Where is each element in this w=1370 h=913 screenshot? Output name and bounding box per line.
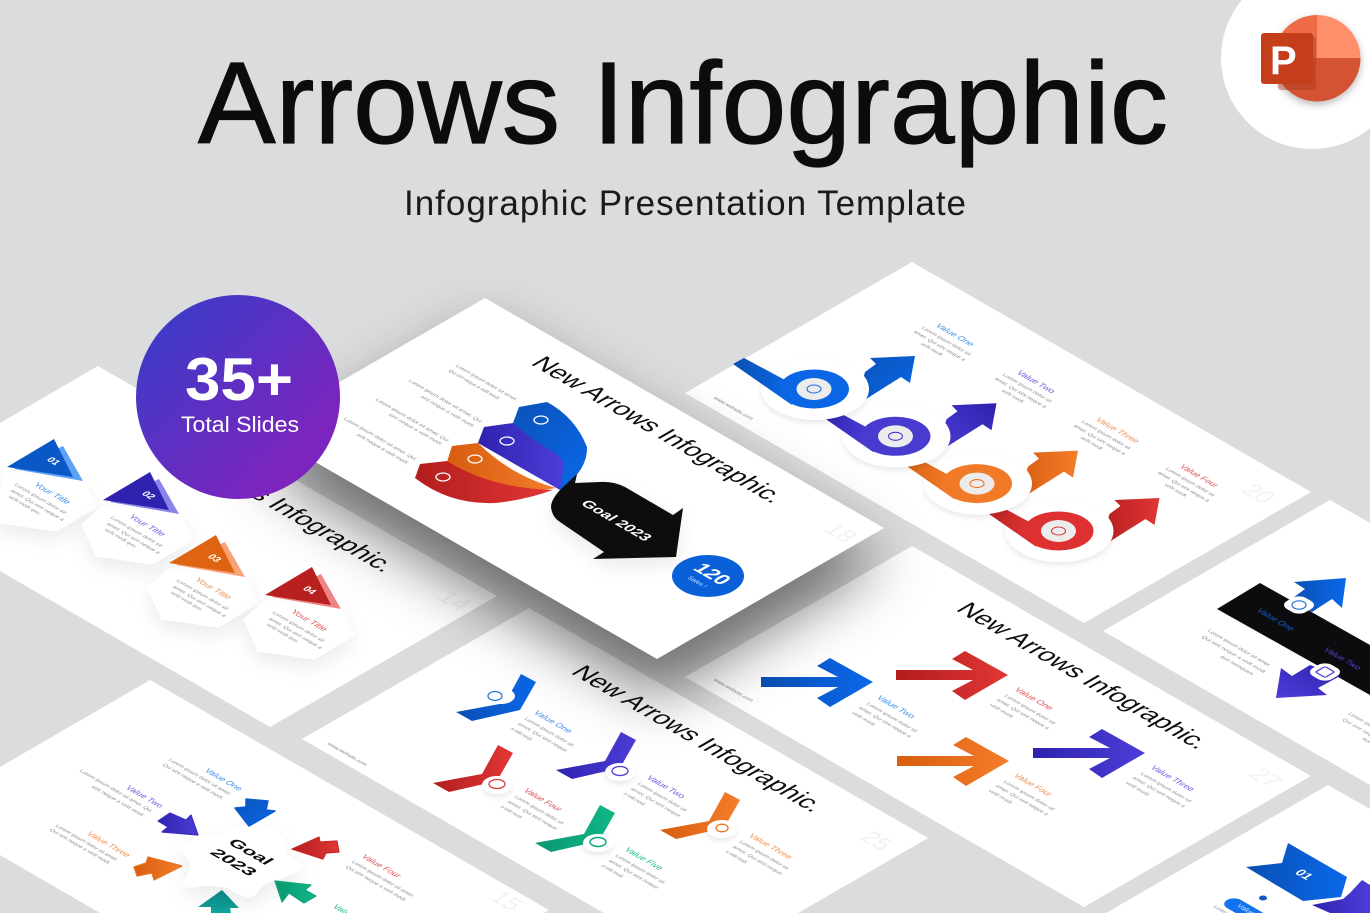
value four text: Lorem ipsum dolor sit — [1163, 467, 1217, 498]
value two text: velit modi. — [849, 711, 878, 728]
slide 14 title: New Arrows Infographic. — [136, 422, 403, 576]
timeline dot — [1259, 896, 1267, 900]
arrow purple — [1033, 729, 1145, 778]
arrow red — [896, 651, 1008, 700]
value one text — [508, 709, 576, 753]
card 04: 04 — [299, 585, 319, 596]
icon node purple — [1306, 661, 1344, 683]
layer icons — [436, 416, 548, 481]
value five text: Lorem ipsum dolor sit — [613, 854, 667, 885]
value one text — [987, 686, 1057, 731]
value two text: amet. Qui sint neque a — [856, 706, 913, 739]
goal label — [206, 836, 277, 879]
card 03: Lorem ipsum dolor sit — [174, 579, 230, 611]
card 01: 01 — [43, 456, 63, 467]
value three text: amet. Qui sint neque — [730, 845, 784, 876]
card 01 — [0, 439, 95, 530]
card 04: Your Title — [288, 608, 331, 633]
arrow blue — [235, 799, 275, 826]
black goal arrow — [551, 474, 683, 559]
value one text: Value One — [1012, 686, 1057, 712]
value three text: amet. Qui sint neque a — [1071, 424, 1127, 456]
arrow head blue — [855, 356, 915, 406]
card 02: velit modi quo. — [102, 528, 139, 549]
value two text: Value Two — [644, 774, 689, 800]
value one text: amet. Qui sint neque — [515, 722, 569, 753]
body text block 1: Lorem ipsum dolor sit amet. — [453, 364, 519, 402]
value three text: Value Three — [1148, 764, 1198, 793]
left body text: Lorem ipsum dolor sit amet — [1205, 629, 1272, 667]
panel: slide 18 — [258, 298, 884, 659]
value three text: Value Three — [1093, 416, 1143, 445]
arrow green — [275, 881, 316, 903]
slide 27 url: www.website.com — [711, 678, 755, 703]
value two text: Lorem ipsum dolor sit — [864, 702, 919, 734]
chevron orange — [660, 792, 740, 839]
body text block 1: Qui sint neque a velit modi. — [446, 369, 502, 401]
value three text: Qui sint neque a velit modi. — [47, 828, 112, 866]
value four text: Value Four — [359, 853, 404, 879]
arrow down purple — [1276, 665, 1340, 698]
panel: slide 14 — [0, 366, 497, 727]
value one text: velit modi. — [918, 342, 945, 358]
value four text: Value Four — [1011, 772, 1056, 798]
layer blue — [513, 402, 587, 490]
card 01: Your Title — [31, 481, 74, 506]
value one text: amet. Qui sint neque a — [994, 698, 1051, 731]
node red — [978, 500, 1114, 562]
card 02 — [83, 472, 191, 563]
card 03: velit modi quo. — [168, 591, 205, 612]
value one text: Qui sint neque a velit modi. — [160, 763, 225, 801]
card 03 — [149, 535, 257, 626]
slide 14 number: 14 — [431, 587, 477, 614]
chevron green — [535, 805, 615, 852]
card 04: Lorem ipsum dolor sit — [270, 611, 326, 643]
arrow up blue — [1290, 578, 1346, 612]
goal gear — [178, 825, 303, 897]
value one label: Value One — [1254, 607, 1298, 632]
value four text: Lorem ipsum dolor sit — [1001, 780, 1056, 812]
value four text: Value Four — [1177, 463, 1222, 489]
value four text: Lorem ipsum dolor sit — [512, 795, 566, 826]
value one text: Value One — [933, 322, 978, 348]
value four text: Value Four — [521, 787, 566, 813]
panel: slide 27 — [685, 546, 1311, 907]
node orange — [896, 453, 1032, 515]
value three text: velit modi. — [1078, 436, 1105, 452]
card 04: amet. Qui sint neque a — [266, 617, 324, 650]
value three text — [47, 824, 134, 866]
layer purple — [478, 423, 564, 490]
value five text: amet. Qui sint neque — [606, 859, 660, 890]
value two text: sint neque a velit modi. — [89, 785, 146, 818]
icon: powerpoint badge: P — [1270, 39, 1297, 83]
left body text: Qui sint neque a velit modi — [1199, 635, 1267, 674]
badge: 35+ total slides: Total Slides — [181, 412, 299, 437]
black band — [1217, 583, 1370, 695]
value two text: amet. Qui sint neque — [628, 787, 682, 818]
card 02: amet. Qui sint neque a — [104, 522, 162, 555]
arrow purple — [158, 813, 198, 835]
arrow head orange — [1018, 451, 1078, 501]
card 02: 02 — [138, 490, 158, 501]
node purple — [814, 405, 950, 467]
value one text: Lorem ipsum dolor sit amet. — [166, 758, 233, 797]
value four text: amet. Qui sint neque a — [1155, 471, 1211, 503]
arrow red — [292, 837, 339, 859]
arrow teal — [198, 890, 239, 913]
slide 25 number: 25 — [853, 827, 899, 854]
card 02: Lorem ipsum dolor sit — [108, 516, 164, 548]
value one text: Lorem ipsum dolor sit — [919, 326, 973, 357]
value two text: amet. Qui sint neque a — [992, 377, 1048, 409]
body text block 4: sint neque a velit modi. — [354, 433, 411, 466]
arrow head red — [1100, 498, 1160, 548]
icon: powerpoint badge — [1221, 0, 1370, 149]
value two label: Value Two — [1321, 646, 1365, 671]
ribbon 01 — [1246, 843, 1347, 901]
value two text — [621, 774, 689, 818]
body text block 3: sint neque a velit modi. — [386, 413, 444, 447]
card 04 — [245, 567, 353, 658]
left body text — [1199, 629, 1272, 677]
value three text: Lorem ipsum dolor sit amet. — [53, 824, 120, 863]
ribbon 01 number: 01 — [1291, 867, 1317, 882]
value two text: a velit modi. — [621, 792, 647, 807]
goal arrow label: Goal 2023 — [577, 497, 656, 543]
value two text — [849, 694, 919, 739]
layer orange — [447, 443, 556, 492]
value three text: a velit modi. — [723, 850, 749, 865]
value three text — [723, 832, 796, 876]
slide 20 url: www.website.com — [711, 396, 755, 421]
card 03: Your Title — [192, 576, 235, 601]
panel: right slide with black band — [1103, 500, 1370, 785]
value four text: Qui sint neque a velit modi. — [343, 865, 408, 903]
card 03: amet. Qui sint neque a — [170, 585, 228, 618]
value one text: Value One — [202, 767, 246, 792]
panel: bottom right slide — [1106, 785, 1370, 913]
card 03: 03 — [204, 553, 224, 564]
sales circle — [672, 555, 744, 597]
chevron purple — [556, 732, 636, 781]
value four text: amet. Qui sint neque a — [993, 784, 1050, 817]
value four text — [343, 853, 416, 902]
value one text: amet. Qui sint neque a — [911, 330, 967, 362]
value pill — [1220, 896, 1286, 913]
body text block 3: Lorem ipsum dolor sit amet. Qui — [373, 398, 450, 443]
goal label: 2023 — [206, 846, 261, 879]
value one text: Value One — [531, 709, 576, 735]
slide 27 title: New Arrows Infographic. — [950, 599, 1217, 753]
value five text: Value Five — [622, 846, 667, 872]
value four text: velit modi. — [986, 789, 1015, 806]
value two text — [77, 769, 167, 818]
ribbon 02 — [1312, 880, 1370, 913]
value two text: Value Two — [1014, 369, 1059, 395]
shadow of slide 18 — [258, 330, 884, 698]
value four text — [986, 772, 1056, 817]
value three text — [1123, 764, 1198, 809]
arrow orange — [134, 857, 182, 880]
value four text: velit modi. — [1162, 483, 1189, 499]
value two text: Lorem ipsum dolor sit amet. Qui — [77, 769, 153, 813]
value four text — [498, 787, 566, 831]
subtitle: Infographic Presentation Template — [404, 184, 966, 223]
value two text: Lorem ipsum dolor sit — [635, 782, 689, 813]
sales circle: Sales ! — [685, 575, 709, 589]
slide 27 number: 27 — [1242, 764, 1288, 791]
value three text: Lorem ipsum dolor sit — [1138, 772, 1193, 804]
value five text — [599, 846, 667, 890]
value three text: Value Three — [746, 832, 796, 861]
title: Arrows Infographic — [198, 38, 1168, 168]
value three text: amet. Qui sint neque a — [1130, 776, 1187, 809]
value two text: Value Two — [874, 694, 919, 720]
card 02: Your Title — [126, 513, 169, 538]
value two text: velit modi. — [999, 389, 1026, 405]
value two text: Lorem ipsum dolor sit — [1000, 373, 1054, 404]
value three text: Value Three — [84, 830, 134, 859]
right body text — [1340, 712, 1370, 757]
value one text — [160, 758, 246, 800]
slide 18 title: New Arrows Infographic. — [525, 353, 792, 507]
value two text: Value Two — [123, 784, 167, 809]
value three text: velit modi. — [1123, 781, 1152, 798]
sales circle: 120 — [688, 560, 736, 588]
arrow blue — [761, 658, 873, 707]
value one text: a velit modi. — [508, 727, 534, 742]
icon node blue — [1280, 594, 1318, 616]
chevron red — [433, 745, 513, 794]
layer red — [415, 461, 553, 503]
panel: slide 15 — [0, 680, 549, 913]
slide 25 title: New Arrows Infographic. — [565, 662, 832, 816]
panel: slide 20 — [685, 262, 1311, 623]
slide 25 url: www.website.com — [325, 742, 369, 767]
badge: 35+ total slides — [136, 295, 340, 499]
card 01: Lorem ipsum dolor sit — [12, 483, 68, 515]
value four text — [1155, 463, 1222, 503]
left body text: quo numquam. — [1218, 655, 1256, 677]
card 01: velit modi quo. — [6, 495, 43, 516]
value two text — [992, 369, 1059, 409]
value three text: Lorem ipsum dolor sit — [737, 840, 791, 871]
slide 20 number: 20 — [1235, 480, 1281, 507]
value one text — [911, 322, 978, 362]
value three text — [1071, 416, 1143, 456]
node blue — [733, 358, 869, 420]
value one text: Lorem ipsum dolor sit — [522, 717, 576, 748]
body text block 4: Lorem ipsum dolor sit amet. Qui — [341, 417, 417, 461]
chevron blue — [456, 674, 536, 721]
arrow orange — [897, 737, 1009, 786]
value three text: Lorem ipsum dolor sit — [1079, 420, 1133, 451]
value five text: a velit modi. — [599, 864, 625, 879]
value four text: Lorem ipsum dolor sit amet. — [349, 860, 416, 899]
arrow head purple — [936, 403, 996, 453]
value one text: Lorem ipsum dolor sit — [1002, 694, 1057, 726]
panel: slide 25 — [302, 608, 928, 913]
card 01: amet. Qui sint neque a — [8, 489, 66, 522]
value four text: a velit modi. — [498, 805, 524, 820]
value one text: velit modi. — [987, 703, 1016, 720]
slide 18 number: 18 — [817, 519, 863, 546]
body text block 2: sint neque a velit modi. — [418, 395, 476, 429]
badge: 35+ total slides: 35+ — [185, 346, 293, 413]
goal label: Goal — [224, 836, 277, 868]
card 04: velit modi quo. — [264, 623, 301, 644]
body text block 2: Lorem ipsum dolor sit amet. Qui — [406, 379, 483, 424]
value four text: amet. Qui sint neque — [505, 800, 559, 831]
